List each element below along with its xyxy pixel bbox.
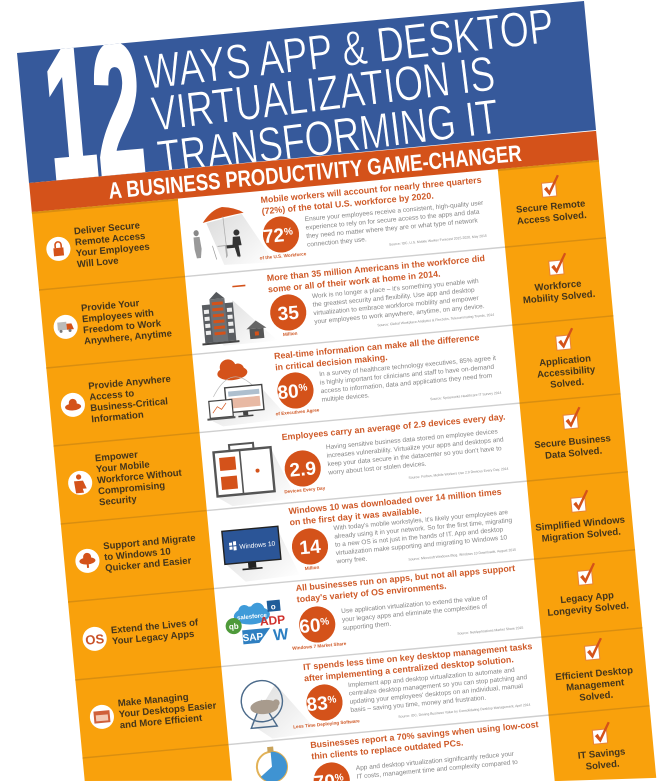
stat caption: Devices Every Day — [284, 486, 326, 494]
solved check — [541, 175, 561, 197]
left label: Workforce Without — [97, 467, 183, 486]
source: Source: IDC, U.S. Mobile Worker Forecast 2015-2020, May 2015 — [389, 234, 487, 247]
stat circle 72%: % — [283, 226, 293, 238]
heading: on the first day it was available. — [289, 505, 422, 527]
stat circle 72%: 72 — [262, 225, 285, 248]
row 2: workforce mobility — [39, 242, 613, 368]
solved check — [555, 328, 575, 350]
body text: virtualization make supporting and migrating to Windows 10 — [336, 534, 508, 557]
heading: More than 35 million Americans in the workforce did — [266, 253, 485, 283]
left label: Your Employees — [76, 242, 150, 259]
illustration: application logos: qb — [228, 622, 239, 632]
left label: Security — [99, 494, 138, 508]
solved check — [592, 722, 612, 744]
subtitle band — [29, 131, 599, 214]
heading: Mobile workers will account for nearly three quarters — [260, 175, 482, 205]
illustration: Windows 10 monitor: Windows 10 — [239, 541, 276, 551]
body text: already using it in your network. So for the first time, migrating — [334, 517, 513, 540]
heading: Businesses report a 70% savings when using low-cost — [310, 719, 539, 750]
illustration: office tower and house — [197, 282, 278, 348]
solved label: Accessibility — [537, 364, 596, 381]
stat caption: Less Time Deploying Software — [293, 718, 360, 730]
illustration: application logos: SAP — [242, 632, 264, 644]
stat circle 83%: 83 — [306, 693, 329, 716]
heading: Employees carry an average of 2.9 devices every day. — [281, 412, 506, 442]
solved check — [570, 490, 590, 512]
illustration: Windows 10 monitor — [222, 525, 300, 583]
solved label: Solved. — [585, 759, 620, 773]
source: Source: Global Workplace Analytics & FlexJobs, Telecommuting Trends, 2014 — [377, 313, 494, 327]
body text: worry free. — [335, 556, 368, 565]
illustration: cafe umbrella — [191, 203, 274, 269]
body text: basis – saving you time, money and frustration. — [350, 695, 487, 714]
stat circle 14 — [290, 527, 330, 566]
source: Source: NetApplications Market Share 2015 — [457, 626, 524, 636]
solved check — [562, 407, 582, 429]
left label: Deliver Secure — [73, 220, 140, 237]
title block — [47, 10, 551, 180]
body text: they need no matter where they are or what type of network — [306, 217, 479, 240]
body text: Work is no longer a place – it's something you enable with — [312, 278, 479, 300]
stat circle 2.9: 2.9 — [289, 458, 317, 482]
body text: to a new OS is not just in the hands of IT. App and desktop — [335, 526, 504, 549]
left label: Anywhere, Anytime — [84, 328, 172, 347]
source: Source: Microsoft Windows Blog, Windows 10 Downloads, August 2015 — [408, 548, 516, 562]
body text: Ensure your employees receive a consistent, high-quality user — [304, 200, 484, 223]
stat caption: Million — [304, 565, 320, 571]
stat circle 35 — [269, 293, 308, 332]
row 4: business data — [54, 401, 628, 524]
row 6: legacy apps — [68, 552, 642, 680]
icon: cloud — [60, 392, 86, 418]
solved label: Solved. — [550, 377, 585, 391]
solved label: Mobility Solved. — [523, 289, 596, 306]
solved label: Access Solved. — [516, 210, 587, 227]
body text: multiple devices. — [321, 392, 370, 404]
solved label: Data Solved. — [545, 446, 603, 462]
solved check — [577, 563, 597, 585]
solved check — [584, 638, 604, 660]
stat circle 14: 14 — [299, 537, 322, 559]
body text: keep your data secure in the datacenter so you don't have to — [327, 445, 502, 468]
heading: IT spends less time on key desktop management tasks — [303, 641, 533, 672]
stat caption: of Executives Agree — [275, 407, 320, 416]
left label: Quicker and Easier — [105, 555, 192, 574]
body text: IT costs, management time and complexity compared to — [356, 759, 518, 781]
left label: Information — [91, 410, 144, 425]
heading: today's variety of OS environments. — [296, 581, 447, 604]
stat circle 83% — [305, 683, 344, 722]
row 3: application accessibility — [47, 320, 621, 446]
heading: after implementing a centralized desktop solution. — [304, 654, 514, 683]
stat circle 80%: % — [298, 382, 308, 394]
row 7: desktop management — [76, 631, 650, 758]
illustration: application logos: W — [273, 625, 290, 645]
body text: centralize desktop management so you can stop patching and — [349, 674, 528, 697]
body text: is highly important for clinicians and staff to have on-demand — [320, 364, 495, 387]
row 8: IT savings — [255, 711, 627, 781]
title line 2: VIRTUALIZATION IS — [149, 47, 498, 142]
left label: Your Legacy Apps — [112, 629, 195, 647]
subtitle: A BUSINESS PRODUCTIVITY GAME-CHANGER — [107, 140, 523, 204]
numeral 12: 12 — [37, 5, 151, 220]
body text: virtualization to embrace workforce mobility and empower — [313, 295, 480, 317]
solved check — [548, 253, 568, 275]
left label: Empower — [95, 449, 139, 464]
stat circle 80%: 80 — [277, 381, 300, 404]
heading: thin clients to replace outdated PCs. — [311, 737, 464, 761]
solved label: Workforce — [534, 279, 582, 294]
left label: Will Love — [77, 256, 119, 270]
left label: and More Efficient — [119, 713, 204, 731]
illustration: hamster wheel — [239, 676, 318, 741]
stat caption: Windows 7 Market Share — [292, 641, 347, 651]
body text: updating your employees' desktops on an individual, manual — [349, 683, 524, 706]
solved label: Management — [566, 677, 626, 694]
icon: OS badge — [82, 626, 108, 652]
stat circle 60%: 60 — [298, 615, 321, 638]
heading: in critical decision making. — [275, 352, 388, 372]
icon: cloud download — [74, 548, 101, 574]
left label: Access to — [89, 388, 135, 403]
left label: Business-Critical — [90, 396, 168, 414]
body text: your legacy apps and eliminate the complexities of — [342, 603, 488, 624]
right orange column — [498, 160, 656, 781]
stat caption: of the U.S. Workforce — [259, 251, 307, 261]
body text: the greatest security and flexibility. Use app and desktop — [312, 287, 475, 309]
body text: your employees to work anywhere, anytime, on any device. — [314, 303, 485, 326]
icon: delivery van — [53, 314, 79, 340]
title line 3: TRANSFORMING IT — [155, 90, 502, 186]
body text: connection they use. — [307, 236, 367, 249]
heading: Windows 10 was downloaded over 14 million times — [288, 487, 502, 516]
left label: Provide Your — [81, 298, 140, 314]
body text: Use application virtualization to extend the value of — [341, 595, 488, 615]
left label: Extend the Lives of — [111, 617, 199, 636]
solved label: Application — [539, 353, 592, 369]
stat circle 60%: % — [320, 616, 330, 628]
stat caption: Million — [283, 331, 298, 337]
icon: mobile worker — [67, 470, 93, 496]
solved label: Secure Business — [534, 433, 611, 451]
heading: All businesses run on apps, but not all apps support — [295, 563, 516, 593]
stat circle 80% — [276, 371, 315, 410]
row 5: windows migration — [61, 475, 635, 602]
heading: Real-time information can make all the difference — [274, 332, 480, 361]
solved label: Legacy App — [560, 590, 615, 606]
left label: Make Managing — [117, 692, 189, 709]
left label: to Windows 10 — [104, 546, 171, 563]
illustration: application logos — [224, 599, 290, 649]
source: Source: IDC, Driving Business Value by Consolidating Desktop Management, April 2014 — [398, 703, 531, 719]
header background: blue panel — [17, 1, 596, 183]
stat circle 70% — [312, 761, 351, 781]
body text: App and desktop virtualization significantly reduce your — [356, 751, 515, 772]
body text: With today's mobile workstyles, it's likely your employees are — [333, 509, 509, 532]
stat circle 83%: % — [327, 694, 337, 706]
solved label: Longevity Solved. — [547, 600, 629, 619]
left label: Your Mobile — [96, 459, 150, 475]
source: Source: Spiceworks Healthcare IT Survey 2014 — [430, 391, 502, 401]
solved label: Secure Remote — [516, 198, 586, 216]
illustration: open briefcase — [213, 439, 297, 507]
left label: Your Desktops Easier — [118, 700, 217, 720]
solved label: Solved. — [579, 690, 614, 704]
infographic body in tilted page coordinates — [29, 131, 656, 781]
icon: lock — [45, 236, 72, 262]
icon: OS badge: OS — [85, 631, 105, 648]
heading: some or all of their work at home in 2014. — [267, 269, 441, 294]
illustration: application logos: o — [270, 602, 276, 612]
row 1: secure remote access — [32, 164, 606, 290]
body text: Having sensitive business data stored on employee devices — [326, 428, 499, 451]
left label: Remote Access — [74, 231, 146, 248]
heading: (72%) of the total U.S. workforce by 2020. — [261, 191, 434, 216]
stat circle 35: 35 — [277, 303, 300, 325]
body text: access to information, data and applications they need from — [320, 372, 492, 395]
source: Source: Forbes, Mobile Workers Use 2.9 Devices Every Day, 2014 — [408, 467, 509, 480]
stat circle 2.9 — [283, 449, 322, 488]
left label: Provide Anywhere — [88, 374, 171, 392]
illustration: application logos: ADP — [259, 612, 286, 629]
icon: desktop window — [89, 704, 115, 730]
solved label: Migration Solved. — [541, 527, 621, 545]
body text: increases vulnerability. Virtualize your apps and desktops and — [326, 436, 504, 460]
left label: Employees with — [82, 308, 155, 325]
left label: Freedom to Work — [83, 318, 162, 336]
stat circle 60% — [298, 605, 337, 644]
body text: In a survey of healthcare technology executives, 85% agree it — [319, 355, 496, 378]
solved label: Simplified Windows — [535, 515, 626, 534]
body text: supporting them. — [343, 621, 392, 632]
body text: worry about lost or stolen devices. — [327, 461, 427, 477]
illustration: stopwatch — [255, 745, 288, 781]
illustration: application logos: salesforce — [237, 613, 268, 622]
solved label: IT Savings — [577, 746, 626, 762]
illustration: cloud and devices — [202, 354, 289, 428]
body text: Implement app and desktop virtualization to automate and — [348, 667, 515, 689]
left label: Compromising — [98, 480, 166, 497]
stat circle 72% — [261, 215, 301, 254]
body text: experience to rely on for secure access to the apps and data — [305, 209, 480, 232]
left label: Support and Migrate — [103, 533, 196, 552]
solved label: Efficient Desktop — [555, 665, 634, 683]
left orange column — [32, 199, 232, 781]
